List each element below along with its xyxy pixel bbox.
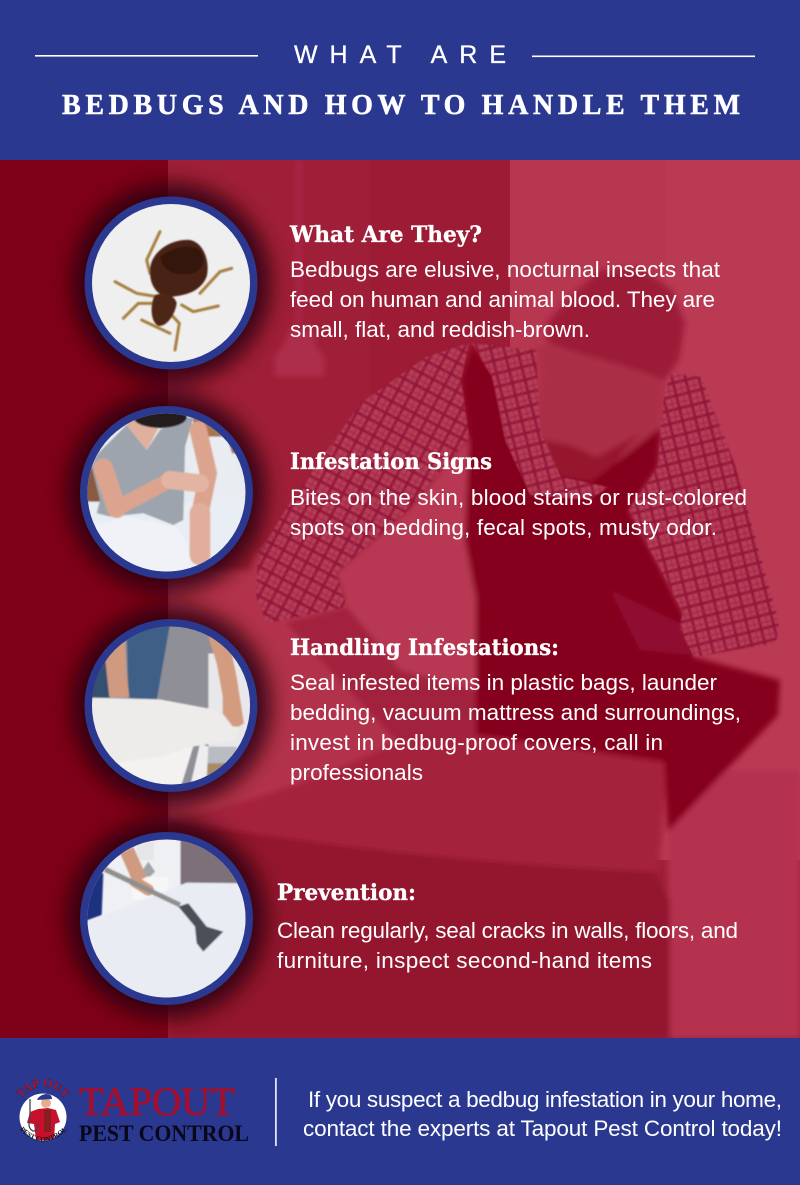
panel: background photo of man inspecting bed [168,160,800,1038]
floor [668,770,800,1038]
text block: handling infestations: Seal infested items in plastic bags, launder [290,670,718,695]
text block: what are they: What Are They? [289,222,482,248]
right sleeve [629,373,779,657]
lamp [275,160,324,376]
icon: logo badge: TAP OUT [16,1079,70,1098]
icon: logo badge [16,1079,70,1142]
logo wordmark: TAPOUT [79,1079,235,1124]
left sleeve [256,343,469,623]
text block: handling infestations: bedding, vacuum mattress and surroundings, [290,700,741,725]
text block: infestation signs: spots on bedding, fecal spots, musty odor. [290,515,717,540]
text block: what are they: Bedbugs are elusive, nocturnal insects that [290,257,721,282]
text block: handling infestations [290,635,741,785]
panel: left band [0,160,168,1038]
footer call to action: contact the experts at Tapout Pest Control today! [303,1116,782,1141]
gap between arm and body [336,437,476,690]
footer call to action: If you suspect a bedbug infestation in your home, [308,1087,782,1112]
text block: prevention: Prevention: [277,880,416,906]
cushion [168,730,668,872]
text block: prevention [277,880,738,973]
photo: bedbug [84,196,258,370]
hair [547,268,685,380]
trousers and vest [461,345,780,832]
title: main heading: BEDBUGS AND HOW TO HANDLE THEM [62,90,740,121]
photo: hands lifting mattress cover [80,619,258,793]
text block: handling infestations: Handling Infestations: [290,635,559,661]
face [536,345,665,477]
panel: footer [16,1078,782,1146]
photo: woman scratching arm [80,406,254,582]
beard [546,438,634,483]
circle shadows [66,183,271,1018]
logo wordmark: PEST CONTROL [79,1121,249,1146]
bed and sheets [168,550,476,820]
logo wordmark [79,1079,249,1146]
text block: prevention: furniture, inspect second-hand items [277,948,652,973]
text block: what are they: feed on human and animal blood. They are [290,287,715,312]
lower bed base [168,820,670,1038]
title: what are: WHAT ARE [294,41,506,69]
text block: prevention: Clean regularly, seal cracks in walls, floors, and [277,918,738,943]
footer call to action [303,1087,782,1141]
text block: handling infestations: invest in bedbug-proof covers, call in [290,730,663,755]
shirt front [472,343,608,500]
text block: what are they: small, flat, and reddish-brown. [290,317,590,342]
forearm [286,607,476,745]
photo: vacuuming mattress [80,832,254,1007]
text block: infestation signs: Bites on the skin, blood stains or rust-colored [290,485,747,510]
text block: infestation signs [290,449,747,540]
text block: handling infestations: professionals [290,760,423,785]
icon: logo badge: PEST CONTROL [20,1126,67,1142]
text block: what are they [289,222,721,342]
panel: header [0,0,800,160]
text block: infestation signs: Infestation Signs [290,449,492,475]
